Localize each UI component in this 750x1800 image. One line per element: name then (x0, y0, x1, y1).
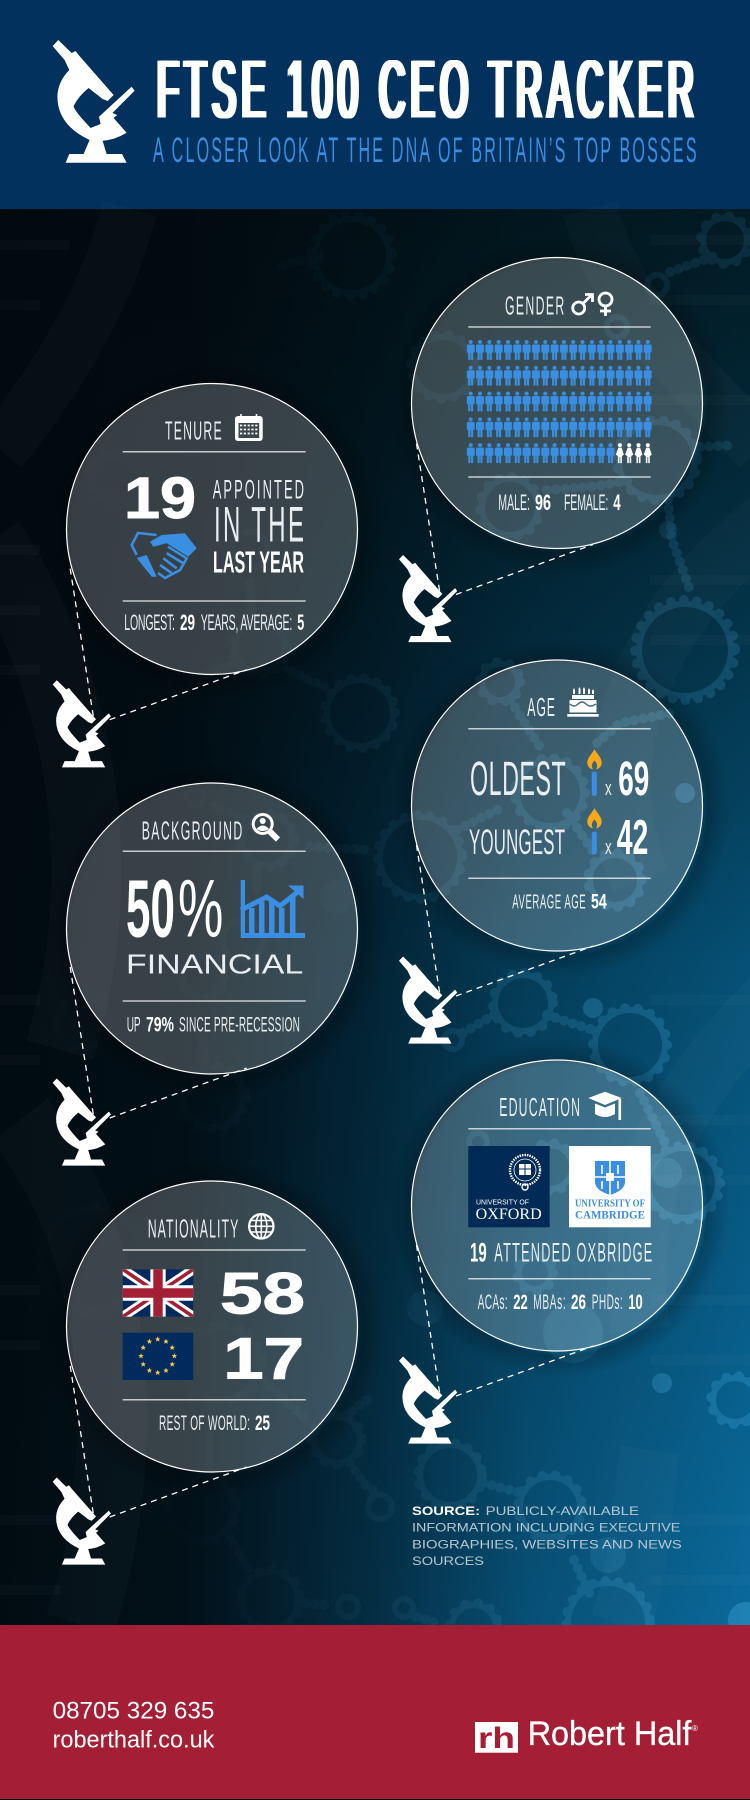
text: 19 attended oxbridge: ATTENDED OXBRIDGE (494, 1239, 652, 1268)
stats: male and female: MALE: (498, 490, 530, 515)
text: 19 attended oxbridge: 19 (470, 1238, 487, 1268)
stats: longest and average: 5 (297, 610, 304, 635)
flag: united kingdom (122, 1269, 194, 1317)
icon: magnifier with person (253, 814, 278, 840)
stats: qualifications: PHDs: (592, 1291, 623, 1314)
contact details: roberthalf.co.uk (53, 1726, 215, 1754)
text: appointed in the last year: LAST YEAR (213, 546, 304, 580)
stats: qualifications: 10 (628, 1291, 643, 1314)
logo: robert half: rh (478, 1722, 515, 1755)
row: youngest: x (605, 837, 612, 859)
source note: SOURCES (412, 1554, 484, 1568)
logo: robert half: ® (692, 1724, 698, 1733)
stat: up 79% (127, 1014, 300, 1037)
row: oldest: x (605, 778, 612, 800)
logo: university of cambridge: CAMBRIDGE (575, 1209, 645, 1221)
header band (0, 0, 750, 209)
stats: longest and average: 29 (180, 610, 195, 635)
panel: tenure (66, 384, 358, 674)
logo: robert half: Robert Half (528, 1715, 692, 1753)
subtitle: A CLOSER LOOK AT THE DNA OF BRITAIN’S TOP BOSSES (153, 130, 697, 170)
stat: up 79%: 79% (146, 1014, 174, 1037)
text: appointed in the last year: APPOINTED (213, 476, 304, 505)
panel: background (66, 783, 358, 1074)
row: oldest (470, 749, 649, 806)
panel: nationality (66, 1181, 358, 1472)
row: oldest: 69 (618, 752, 649, 806)
stat: average age: AVERAGE AGE (512, 892, 586, 913)
row: oldest: OLDEST (470, 753, 566, 806)
panel: age (412, 660, 702, 951)
pictogram: 96 men, 4 women (467, 340, 652, 463)
icon: rising bar chart (241, 880, 305, 938)
stats: qualifications: 22 (513, 1291, 528, 1314)
contact details (53, 1698, 215, 1754)
icon: male and female symbols (573, 293, 612, 316)
heading: age: AGE (527, 694, 555, 722)
stats: male and female: 96 (535, 490, 551, 515)
logo: university of oxford: OXFORD (476, 1206, 542, 1223)
text: appointed in the last year (213, 476, 304, 580)
row: youngest: 42 (617, 810, 648, 865)
logo: university of cambridge (569, 1146, 651, 1227)
microscope pointer: age (399, 845, 593, 1044)
microscope pointer: tenure (53, 569, 247, 767)
icon: birthday cake (567, 687, 599, 717)
stat: up 79%: UP (127, 1014, 141, 1037)
stat: rest of world: REST OF WORLD: (159, 1412, 250, 1435)
stat: average age: 54 (591, 890, 607, 913)
row: youngest (469, 808, 648, 865)
icon: microscope logo (53, 40, 135, 163)
stats: male and female: 4 (613, 490, 621, 515)
stats: longest and average: LONGEST: (124, 610, 175, 635)
logo: university of oxford (468, 1146, 550, 1227)
stat: 17: 17 (223, 1326, 304, 1391)
logo: university of cambridge: UNIVERSITY OF (575, 1199, 645, 1210)
flag: european union (123, 1333, 193, 1380)
title: FTSE 100 CEO TRACKER (154, 42, 691, 136)
panel: education (412, 1060, 702, 1351)
stat: rest of world: 25 (255, 1412, 270, 1435)
stats: male and female: FEMALE: (564, 490, 608, 515)
logo: university of oxford: UNIVERSITY OF (476, 1199, 529, 1206)
microscope pointer: education (399, 1245, 593, 1444)
microscope pointer: nationality (53, 1366, 247, 1565)
footer band (0, 1625, 750, 1799)
source note (412, 1504, 682, 1568)
stat: 19: 19 (124, 466, 196, 531)
heading: education: EDUCATION (499, 1094, 580, 1122)
label: financial: FINANCIAL (126, 948, 303, 979)
contact details: 08705 329 635 (53, 1698, 214, 1725)
stats: longest and average: YEARS, AVERAGE: (201, 610, 292, 635)
stats: qualifications: ACAs: (478, 1291, 508, 1314)
stats: male and female (498, 490, 621, 515)
panel: gender (412, 258, 702, 548)
microscope pointer: background (53, 967, 247, 1166)
stat: 50%: 50 (126, 864, 175, 955)
source note: PUBLICLY-AVAILABLE (486, 1504, 639, 1518)
stats: longest and average (124, 610, 304, 635)
source note: SOURCE: (412, 1504, 480, 1518)
icon: calendar (235, 414, 263, 441)
source note: BIOGRAPHIES, WEBSITES AND NEWS (412, 1537, 682, 1551)
stat: up 79%: SINCE PRE-RECESSION (179, 1014, 300, 1037)
microscope pointer: gender (399, 444, 593, 642)
heading: gender: GENDER (505, 293, 564, 321)
heading: tenure: TENURE (165, 418, 222, 446)
icon: globe (249, 1214, 274, 1239)
icon: graduation cap (588, 1092, 622, 1120)
stats: qualifications (478, 1291, 643, 1314)
row: youngest: YOUNGEST (469, 822, 565, 862)
text: appointed in the last year: IN THE (214, 498, 304, 553)
source note: INFORMATION INCLUDING EXECUTIVE (412, 1521, 680, 1535)
stats: qualifications: MBAs: (533, 1291, 566, 1314)
stat: 58: 58 (220, 1261, 305, 1326)
heading: nationality: NATIONALITY (148, 1216, 238, 1244)
stats: qualifications: 26 (571, 1291, 586, 1314)
stat: 50%: % (178, 864, 223, 955)
heading: background: BACKGROUND (142, 818, 242, 846)
icon: handshake (132, 533, 197, 578)
